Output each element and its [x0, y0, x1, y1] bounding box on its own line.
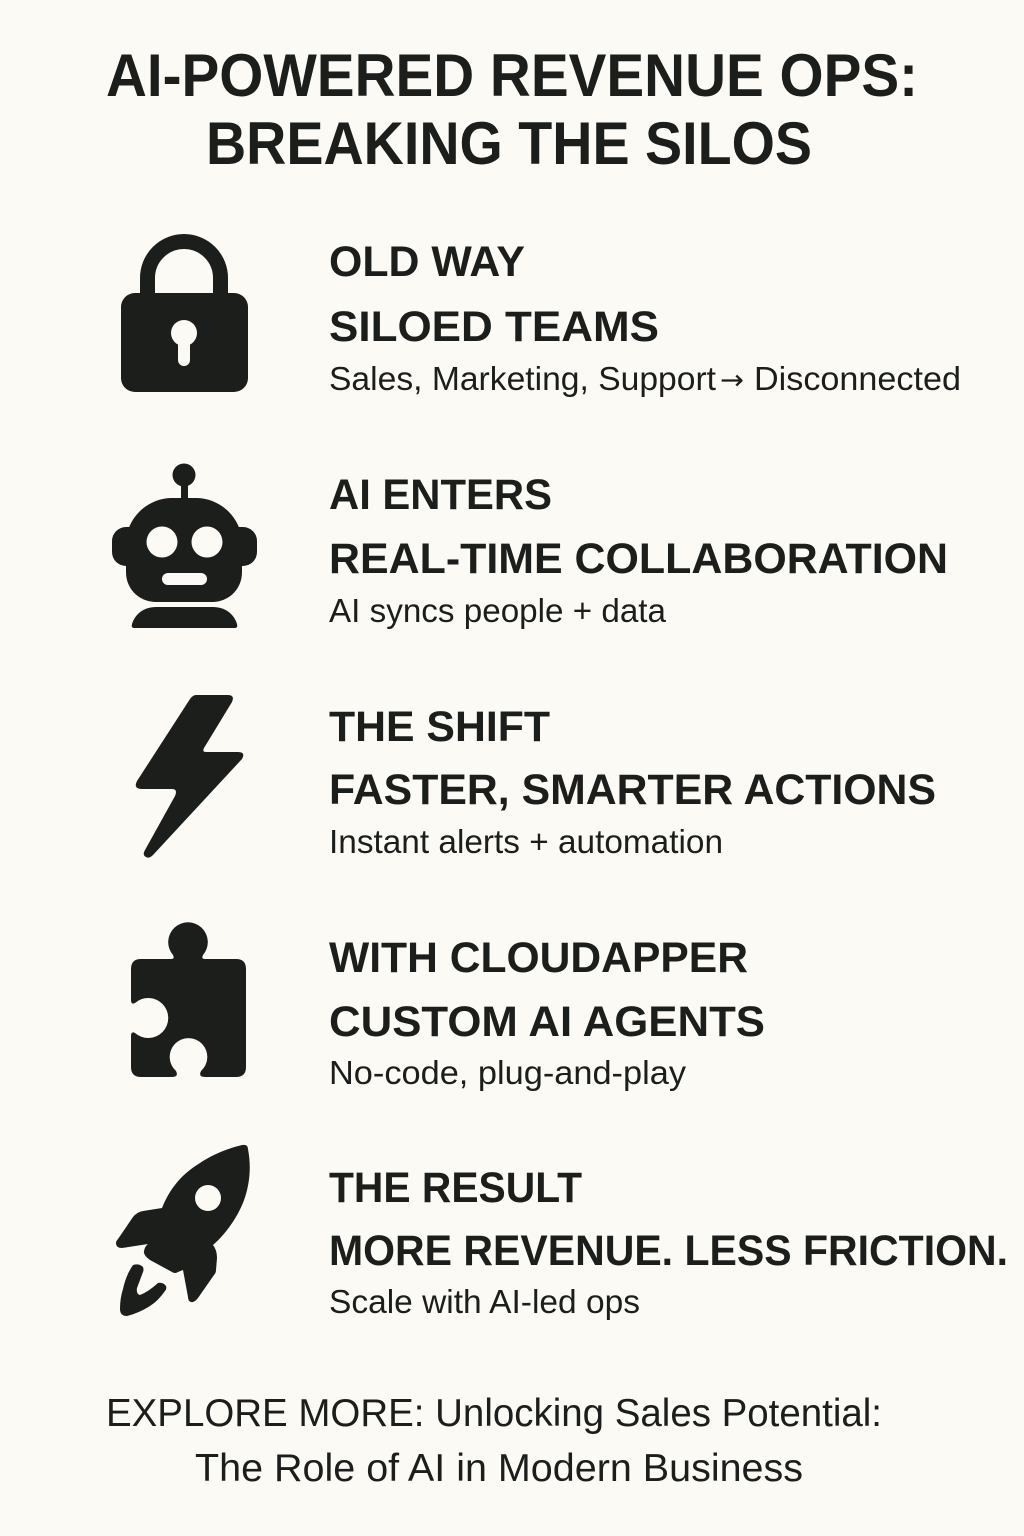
- description: ai syncs: AI syncs people + data: [329, 592, 667, 629]
- description: disconnected teams: [329, 360, 961, 397]
- panel: old way: [121, 238, 961, 397]
- icon: padlock: [121, 242, 248, 392]
- heading: real-time collaboration: REAL-TIME COLLABORATION: [329, 535, 948, 583]
- description: disconnected teams: →: [720, 365, 744, 396]
- heading: siloed teams: SILOED TEAMS: [329, 303, 659, 351]
- icon: robot: [112, 464, 257, 628]
- description: instant alerts: Instant alerts + automation: [329, 823, 723, 860]
- description: disconnected teams: Sales, Marketing, Support: [329, 360, 716, 397]
- description: no-code: No-code, plug-and-play: [329, 1054, 687, 1091]
- footer link text: The Role of AI in Modern Business: [195, 1447, 803, 1490]
- icon: rocket: [116, 1145, 250, 1316]
- panel: with cloudapper: [131, 922, 765, 1091]
- title: AI-POWERED REVENUE OPS:: [106, 42, 918, 109]
- heading: with cloudapper: WITH CLOUDAPPER: [329, 934, 748, 982]
- icon: puzzle piece: [131, 922, 246, 1077]
- heading: custom ai agents: CUSTOM AI AGENTS: [329, 998, 765, 1046]
- heading: faster smarter actions: FASTER, SMARTER ACTIONS: [329, 766, 936, 814]
- panel: ai enters: [112, 464, 948, 629]
- heading: ai enters: AI ENTERS: [329, 471, 552, 519]
- footer link text: EXPLORE MORE: Unlocking Sales Potential:: [106, 1392, 882, 1435]
- icon: lightning bolt: [136, 695, 243, 858]
- heading: old way: OLD WAY: [329, 238, 525, 286]
- footer link text: [106, 1392, 882, 1490]
- heading: the shift: THE SHIFT: [329, 703, 550, 751]
- title: BREAKING THE SILOS: [206, 110, 812, 177]
- heading: the result: THE RESULT: [329, 1164, 582, 1212]
- description: disconnected teams: Disconnected: [754, 360, 961, 397]
- heading: more revenue less friction: MORE REVENUE. LESS FRICTION.: [329, 1227, 1008, 1275]
- description: scale with ai: Scale with AI-led ops: [329, 1283, 640, 1320]
- title: [106, 42, 918, 177]
- panel: the result: [116, 1145, 1008, 1320]
- panel: the shift: [136, 695, 936, 860]
